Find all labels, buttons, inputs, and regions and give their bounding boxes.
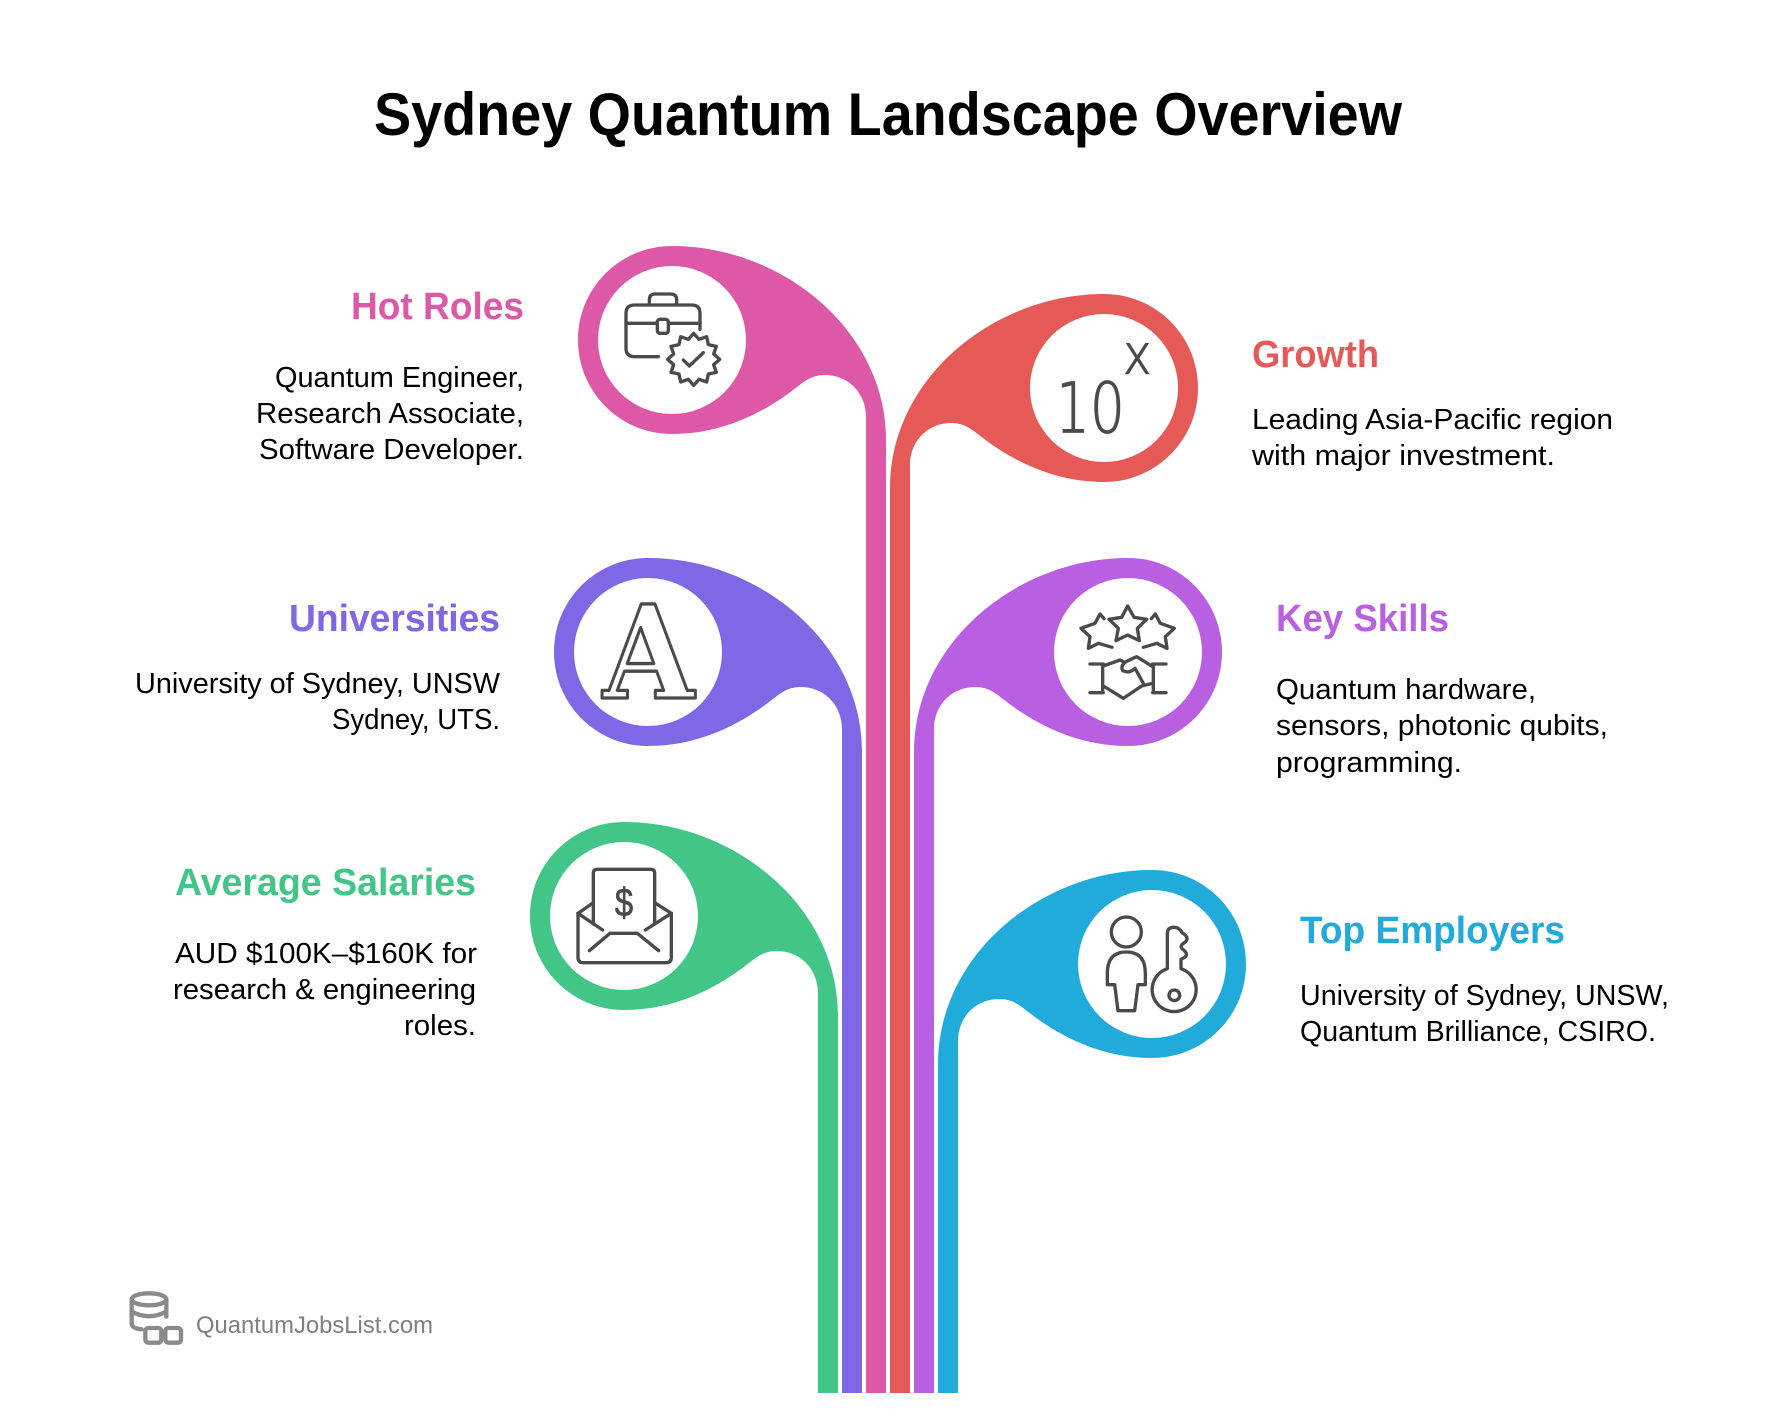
icon: database with link (132, 1293, 181, 1343)
panel: Hot Roles (256, 246, 886, 1393)
text block (135, 668, 501, 736)
heading: Top Employers (1300, 910, 1565, 952)
text block: AUD $100K–$160K for (175, 938, 477, 970)
text block: Sydney, UTS. (332, 704, 500, 736)
panel: Growth (890, 294, 1613, 1393)
stem and bulb: green (530, 822, 838, 1393)
panel: Key Skills (914, 558, 1608, 1393)
stem and bulb: red (890, 294, 1198, 1393)
text block (1300, 980, 1669, 1048)
heading: Growth (1252, 334, 1379, 376)
text block: with major investment. (1251, 440, 1555, 472)
panel: Universities (135, 558, 862, 1393)
icon circle (1054, 578, 1202, 726)
icon: stars and handshake (1081, 606, 1174, 698)
panel: Top Employers (938, 870, 1669, 1393)
heading: Hot Roles (351, 286, 524, 328)
icon: envelope with dollar sheet (578, 869, 671, 963)
icon: letter A: A (602, 578, 696, 729)
icon circle (550, 842, 698, 990)
text block: Leading Asia-Pacific region (1252, 404, 1613, 436)
icon: briefcase with badge (626, 294, 720, 385)
logo text: QuantumJobsList.com (196, 1312, 433, 1339)
stem and bulb: pink (578, 246, 886, 1393)
icon circle (574, 578, 722, 726)
text block: Software Developer. (259, 434, 524, 466)
text block: Quantum Engineer, (275, 362, 524, 394)
icon circle (598, 266, 746, 414)
heading: Key Skills (1276, 598, 1449, 640)
text block: Quantum hardware, (1276, 674, 1536, 706)
icon: envelope with dollar sheet: $ (615, 880, 633, 925)
logo: QuantumJobsList.com (132, 1293, 433, 1343)
stem and bulb: purple (554, 558, 862, 1393)
stem and bulb: violet (914, 558, 1222, 1393)
text block: programming. (1276, 747, 1462, 779)
icon: 10x (1055, 320, 1153, 452)
panel: Average Salaries (173, 822, 838, 1393)
icon circle (1030, 314, 1178, 462)
icon: person and key (1107, 917, 1196, 1012)
text block: research & engineering (173, 974, 476, 1006)
text block: Research Associate, (256, 398, 524, 430)
title: Sydney Quantum Landscape Overview (374, 81, 1402, 148)
icon: 10x: x (1122, 320, 1153, 390)
text block (1276, 674, 1608, 779)
text block: roles. (404, 1010, 476, 1042)
heading: Universities (289, 598, 500, 640)
text block: University of Sydney, UNSW (135, 668, 501, 700)
icon circle (1078, 890, 1226, 1038)
text block (1251, 404, 1613, 472)
text block (256, 362, 524, 466)
text block (173, 938, 477, 1042)
text block: Quantum Brilliance, CSIRO. (1300, 1016, 1656, 1048)
text block: University of Sydney, UNSW, (1300, 980, 1669, 1012)
stem and bulb: blue (938, 870, 1246, 1393)
text block: sensors, photonic qubits, (1276, 710, 1608, 742)
icon: 10x: 10 (1055, 367, 1125, 452)
heading: Average Salaries (175, 862, 476, 904)
